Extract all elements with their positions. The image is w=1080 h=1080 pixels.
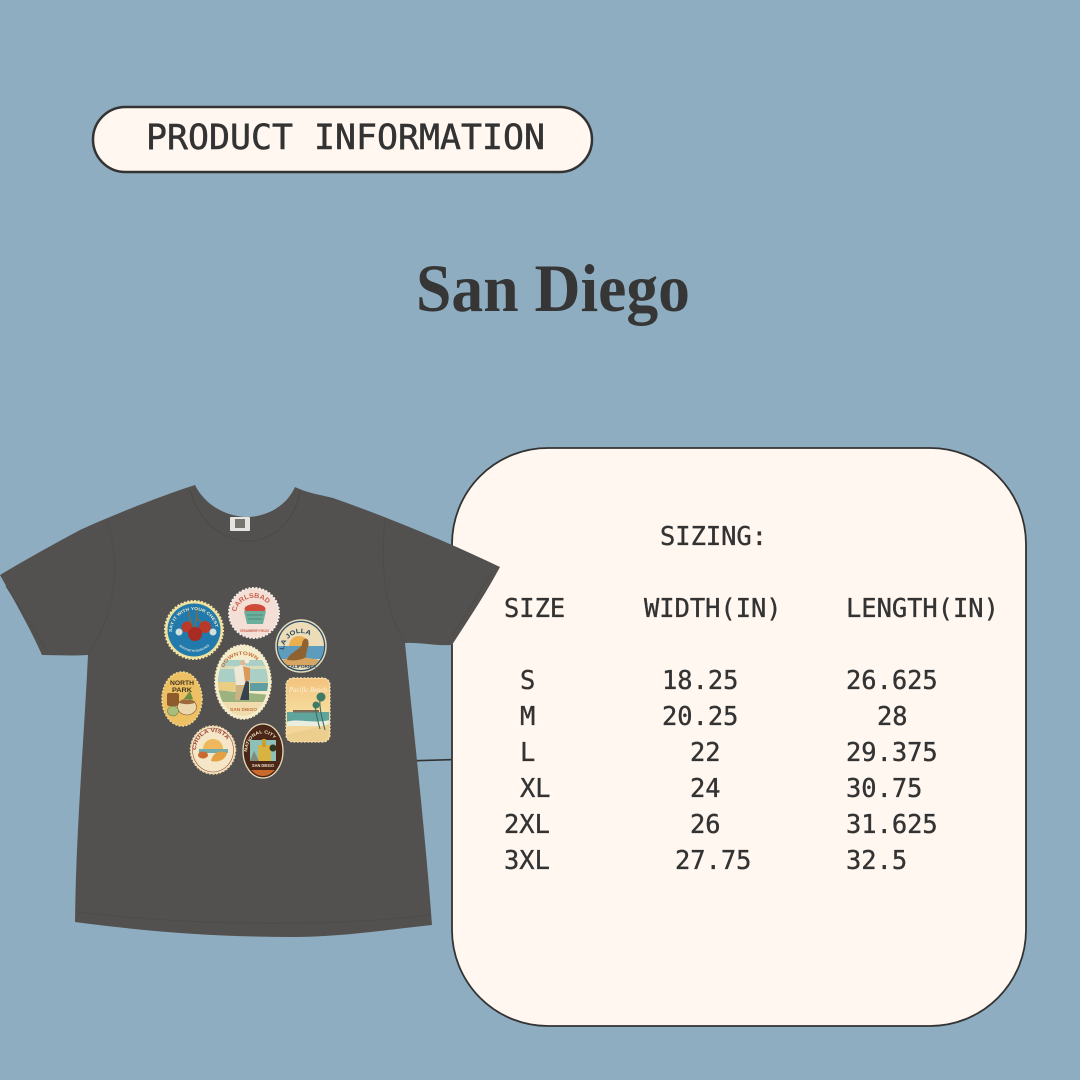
- width column: 22: [690, 737, 721, 767]
- size column: S: [520, 665, 535, 695]
- panel: sizing table: [452, 448, 1026, 1026]
- sticker: Chula Vista: CHULA VISTA: [192, 728, 228, 750]
- sticker: Carlsbad: [228, 587, 280, 639]
- sticker: North Park: PARK: [172, 688, 193, 694]
- sticker: National City: NATIONAL CITY: [244, 730, 276, 752]
- size column: L: [520, 737, 535, 767]
- table header: LENGTH(IN): [846, 593, 999, 623]
- size column: [504, 665, 551, 875]
- size column: M: [520, 701, 535, 731]
- sticker: Downtown San Diego: DOWNTOWN: [221, 651, 259, 668]
- length column: 31.625: [846, 809, 938, 839]
- width column: 18.25: [662, 665, 738, 695]
- length column: 30.75: [846, 773, 922, 803]
- sticker: cherries: SAYITWITHYOURCHEST: [179, 644, 210, 652]
- width column: 27.75: [675, 845, 751, 875]
- sticker: National City: [242, 723, 284, 779]
- shirt body: [0, 485, 500, 937]
- sticker: Carlsbad: CARLSBAD: [232, 593, 270, 612]
- sticker: Pacific Beach: [286, 678, 330, 742]
- sticker: cherries: SAY IT WITH YOUR CHEST: [169, 607, 218, 632]
- title: San Diego: [416, 250, 690, 326]
- table header: [504, 593, 999, 623]
- badge: product information: PRODUCT INFORMATION: [146, 118, 545, 158]
- width column: 20.25: [662, 701, 738, 731]
- sticker: North Park: NORTH: [170, 681, 194, 687]
- sticker: Chula Vista: [190, 725, 236, 775]
- sticker: La Jolla: [275, 619, 327, 673]
- sticker: Downtown San Diego: [214, 644, 272, 720]
- connector line: [412, 760, 454, 761]
- neck label: [230, 517, 250, 531]
- width column: 24: [690, 773, 721, 803]
- length column: [846, 665, 938, 875]
- sticker: Pacific Beach: Pacific Beach: [288, 686, 327, 694]
- table header: WIDTH(IN): [644, 593, 782, 623]
- sticker: cherries: [164, 600, 224, 660]
- width column: [662, 665, 751, 875]
- sticker: La Jolla: CALIFORNIA: [287, 664, 317, 669]
- size column: 2XL: [504, 809, 550, 839]
- sticker: North Park: [162, 672, 202, 726]
- sizing heading: SIZING:: [660, 521, 767, 551]
- length column: 32.5: [846, 845, 907, 875]
- length column: 29.375: [846, 737, 938, 767]
- table header: SIZE: [504, 593, 565, 623]
- sticker: Carlsbad: STRAWBERRY FIELDS: [240, 629, 270, 633]
- sticker: National City: SAN DIEGO: [252, 763, 275, 768]
- sticker: La Jolla: LA JOLLA: [280, 628, 310, 650]
- t-shirt: [0, 485, 500, 937]
- size column: 3XL: [504, 845, 550, 875]
- sleeve seams: [6, 518, 492, 655]
- sticker: Downtown San Diego: SAN DIEGO: [230, 707, 258, 712]
- size column: XL: [520, 773, 551, 803]
- badge: product information: [93, 107, 592, 172]
- width column: 26: [690, 809, 721, 839]
- collar: [190, 490, 300, 541]
- length column: 26.625: [846, 665, 938, 695]
- length column: 28: [877, 701, 908, 731]
